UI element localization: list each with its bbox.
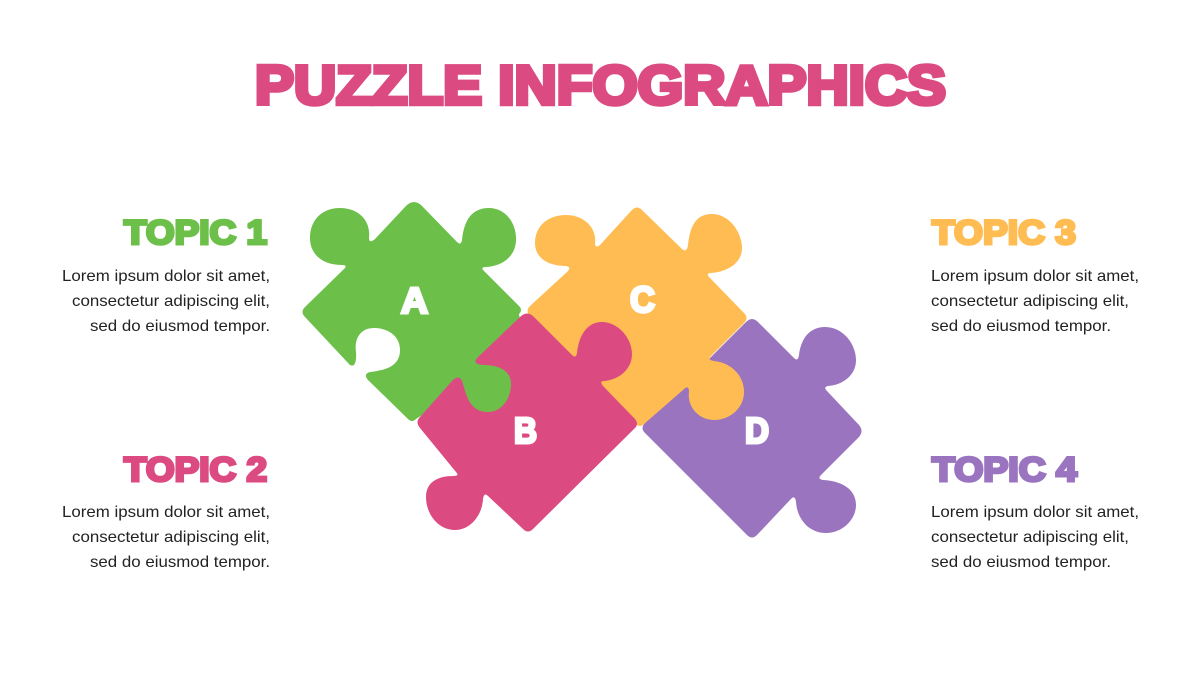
piece D: purple <box>642 319 862 538</box>
topic 1 text <box>62 268 270 335</box>
topic 2 text: consectetur adipiscing elit, <box>72 529 270 546</box>
topic 2 text: Lorem ipsum dolor sit amet, <box>62 504 270 521</box>
topic 4 block <box>931 451 1139 571</box>
topic 4 text: consectetur adipiscing elit, <box>931 529 1129 546</box>
topic 4 text: Lorem ipsum dolor sit amet, <box>931 504 1139 521</box>
letter B: B <box>514 410 537 451</box>
puzzle diagram <box>302 202 862 538</box>
topic 3 text <box>931 268 1139 335</box>
letter C: C <box>630 279 655 320</box>
piece C: orange <box>528 208 746 426</box>
topic 3 heading: TOPIC 3 <box>932 214 1076 252</box>
topic 3 block <box>931 214 1139 335</box>
letter D: D <box>745 410 769 451</box>
topic 2 text: sed do eiusmod tempor. <box>90 554 270 571</box>
topic 4 heading: TOPIC 4 <box>932 451 1077 489</box>
topic 3 text: sed do eiusmod tempor. <box>931 318 1111 335</box>
topic 1 text: Lorem ipsum dolor sit amet, <box>62 268 270 285</box>
topic 1 heading: TOPIC 1 <box>124 214 267 252</box>
piece B: pink <box>418 314 637 532</box>
topic 2 block <box>62 451 270 571</box>
topic 2 heading: TOPIC 2 <box>124 451 267 489</box>
topic 3 text: Lorem ipsum dolor sit amet, <box>931 268 1139 285</box>
topic 1 text: sed do eiusmod tempor. <box>90 318 270 335</box>
topic 4 text <box>931 504 1139 571</box>
letter A: A <box>401 280 428 321</box>
topic 4 text: sed do eiusmod tempor. <box>931 554 1111 571</box>
topic 1 block <box>62 214 270 335</box>
title: PUZZLE INFOGRAPHICS <box>255 54 946 116</box>
topic 3 text: consectetur adipiscing elit, <box>931 293 1129 310</box>
piece A: green <box>302 202 530 421</box>
topic 1 text: consectetur adipiscing elit, <box>72 293 270 310</box>
topic 2 text <box>62 504 270 571</box>
